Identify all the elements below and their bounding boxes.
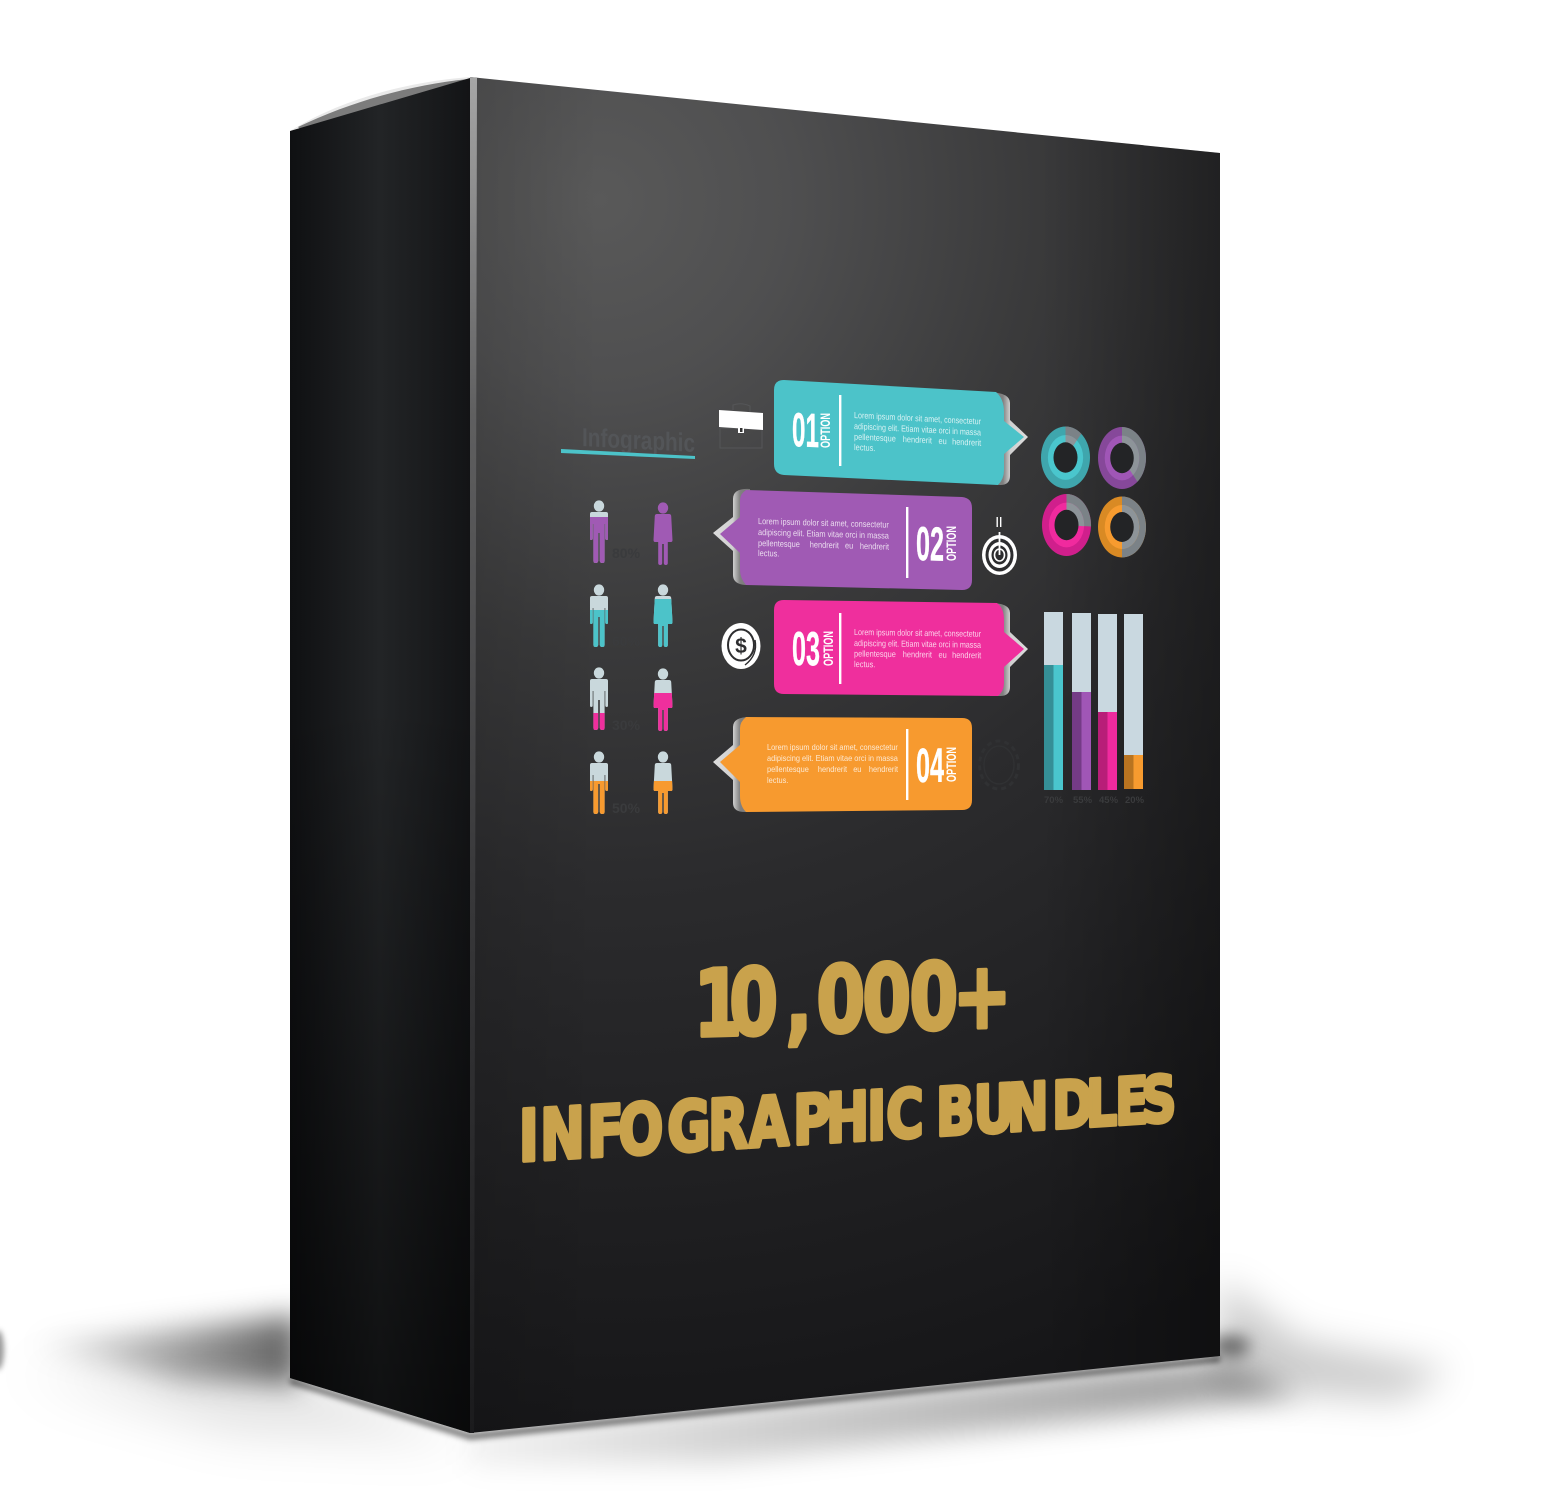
body text: hendrerit [808, 540, 840, 550]
headline: INFOGRAPHIC BUNDLES: U [974, 1070, 1014, 1149]
headline: INFOGRAPHIC BUNDLES: N [1007, 1068, 1049, 1147]
headline: 10,000+: 0 [729, 949, 778, 1058]
headline: 10,000+: , [786, 948, 812, 1056]
donut: pink [1042, 494, 1091, 556]
body text: hendrerit [950, 650, 982, 660]
headline: INFOGRAPHIC BUNDLES: R [708, 1084, 748, 1166]
headline: INFOGRAPHIC BUNDLES: I [519, 1094, 539, 1178]
headline: INFOGRAPHIC BUNDLES: L [1086, 1065, 1117, 1142]
body text: hendrerit [901, 434, 933, 446]
box: left side panel [290, 78, 470, 1433]
person: female purple [654, 502, 672, 565]
bar: 20% orange: 20% [1125, 795, 1145, 806]
label: 60%: 60% [612, 633, 641, 649]
body text: pellentesque [854, 432, 896, 444]
body text: eu [936, 436, 947, 446]
donut: orange [1098, 496, 1146, 558]
headline: INFOGRAPHIC BUNDLES: E [1115, 1064, 1148, 1140]
person: male purple 80% [590, 500, 608, 563]
headline: INFOGRAPHIC BUNDLES: N [540, 1092, 585, 1177]
headline: INFOGRAPHIC BUNDLES: F [587, 1089, 624, 1174]
headline: 10,000+: 1 [694, 950, 742, 1059]
card 04 orange [713, 717, 972, 812]
label: 30%: 30% [612, 717, 641, 733]
number 03: 03 [792, 623, 820, 676]
headline: 10,000+: + [953, 942, 1011, 1051]
number 02: 02 [916, 518, 944, 572]
body text: eu [936, 650, 947, 660]
person: male pink [590, 667, 608, 730]
person: female orange [654, 751, 672, 814]
headline: 10,000+: 0 [910, 944, 958, 1052]
bar: 70% teal [1044, 612, 1064, 806]
body text: pellentesque [767, 764, 809, 774]
donut charts [1041, 426, 1146, 558]
body text: hendrerit [867, 764, 899, 774]
icon: briefcase [719, 404, 763, 448]
number 01: 01 [792, 404, 819, 458]
body text: lectus. [854, 442, 875, 453]
body text: eu [851, 764, 861, 774]
donut: teal [1041, 426, 1090, 488]
headline: 10,000+: 0 [817, 947, 865, 1055]
headline: INFOGRAPHIC BUNDLES: G [667, 1085, 711, 1169]
label OPTION: OPTION [817, 413, 833, 448]
body text [758, 516, 890, 562]
icon: dollar coin: $ [735, 635, 747, 658]
body text: Lorem ipsum dolor sit amet, consectetur [758, 516, 889, 530]
number 04: 04 [916, 740, 944, 793]
headline: INFOGRAPHIC BUNDLES: C [886, 1076, 924, 1156]
headline: INFOGRAPHIC BUNDLES: P [793, 1080, 831, 1161]
pictogram people column [590, 500, 672, 816]
body text [854, 410, 982, 459]
label OPTION: OPTION [943, 747, 959, 782]
card 03 pink [774, 600, 1028, 696]
headline: INFOGRAPHIC BUNDLES: A [749, 1082, 789, 1164]
label OPTION: OPTION [943, 526, 959, 561]
headline: INFOGRAPHIC BUNDLES: O [618, 1087, 663, 1172]
body text: eu [843, 541, 853, 551]
card 02 purple [713, 489, 972, 590]
bar: 55% purple [1072, 613, 1093, 806]
bar: 45% pink: 45% [1099, 795, 1119, 806]
body text: adipiscing elit. Etiam vitae orci in massa [854, 638, 981, 650]
body text: Lorem ipsum dolor sit amet, consectetur [854, 627, 981, 639]
body text: adipiscing elit. Etiam vitae orci in massa [854, 421, 981, 438]
body text: Lorem ipsum dolor sit amet, consectetur [854, 410, 981, 427]
body text: hendrerit [950, 437, 982, 448]
body text: adipiscing elit. Etiam vitae orci in massa [767, 753, 898, 763]
body text: hendrerit [858, 541, 890, 552]
icon: target [982, 517, 1017, 575]
bar: 20% orange [1124, 614, 1145, 806]
label: 50%: 50% [612, 800, 641, 816]
body text: lectus. [767, 775, 788, 785]
headline: INFOGRAPHIC BUNDLES: I [867, 1077, 886, 1157]
person: female pink [654, 668, 672, 731]
person: male teal [590, 584, 608, 647]
body text: hendrerit [816, 764, 848, 774]
body text: lectus. [854, 659, 875, 669]
headline: INFOGRAPHIC BUNDLES: B [936, 1071, 974, 1151]
headline: INFOGRAPHIC BUNDLES: H [826, 1078, 869, 1159]
donut: purple [1098, 427, 1146, 489]
icon: dollar coin [722, 623, 760, 669]
bar: 45% pink [1098, 614, 1119, 806]
body text: lectus. [758, 548, 779, 559]
body text: pellentesque [854, 649, 896, 659]
person: female teal [654, 584, 672, 647]
body text [767, 742, 899, 785]
label: 80%: 80% [612, 545, 641, 561]
bar: 70% teal: 70% [1044, 795, 1064, 806]
label OPTION: OPTION [820, 631, 836, 666]
person: male orange [590, 751, 608, 814]
bar: 55% purple: 55% [1073, 795, 1093, 806]
body text: Lorem ipsum dolor sit amet, consectetur [767, 742, 898, 752]
box shadow [0, 1280, 1450, 1465]
icon: gear [980, 741, 1018, 789]
heading: Infographic [561, 422, 695, 459]
headline: INFOGRAPHIC BUNDLES: S [1141, 1062, 1176, 1139]
bar chart [1044, 612, 1145, 806]
heading: Infographic: Infographic [582, 422, 695, 458]
card 01 teal [774, 380, 1028, 485]
box: front face [470, 77, 1220, 1433]
headline: 10,000+: 0 [862, 945, 911, 1054]
body text: hendrerit [901, 650, 933, 660]
headline: INFOGRAPHIC BUNDLES: D [1052, 1065, 1093, 1144]
box: top flap [290, 77, 472, 131]
body text [854, 627, 982, 671]
body text: pellentesque [758, 538, 800, 549]
body text: adipiscing elit. Etiam vitae orci in massa [758, 527, 889, 541]
